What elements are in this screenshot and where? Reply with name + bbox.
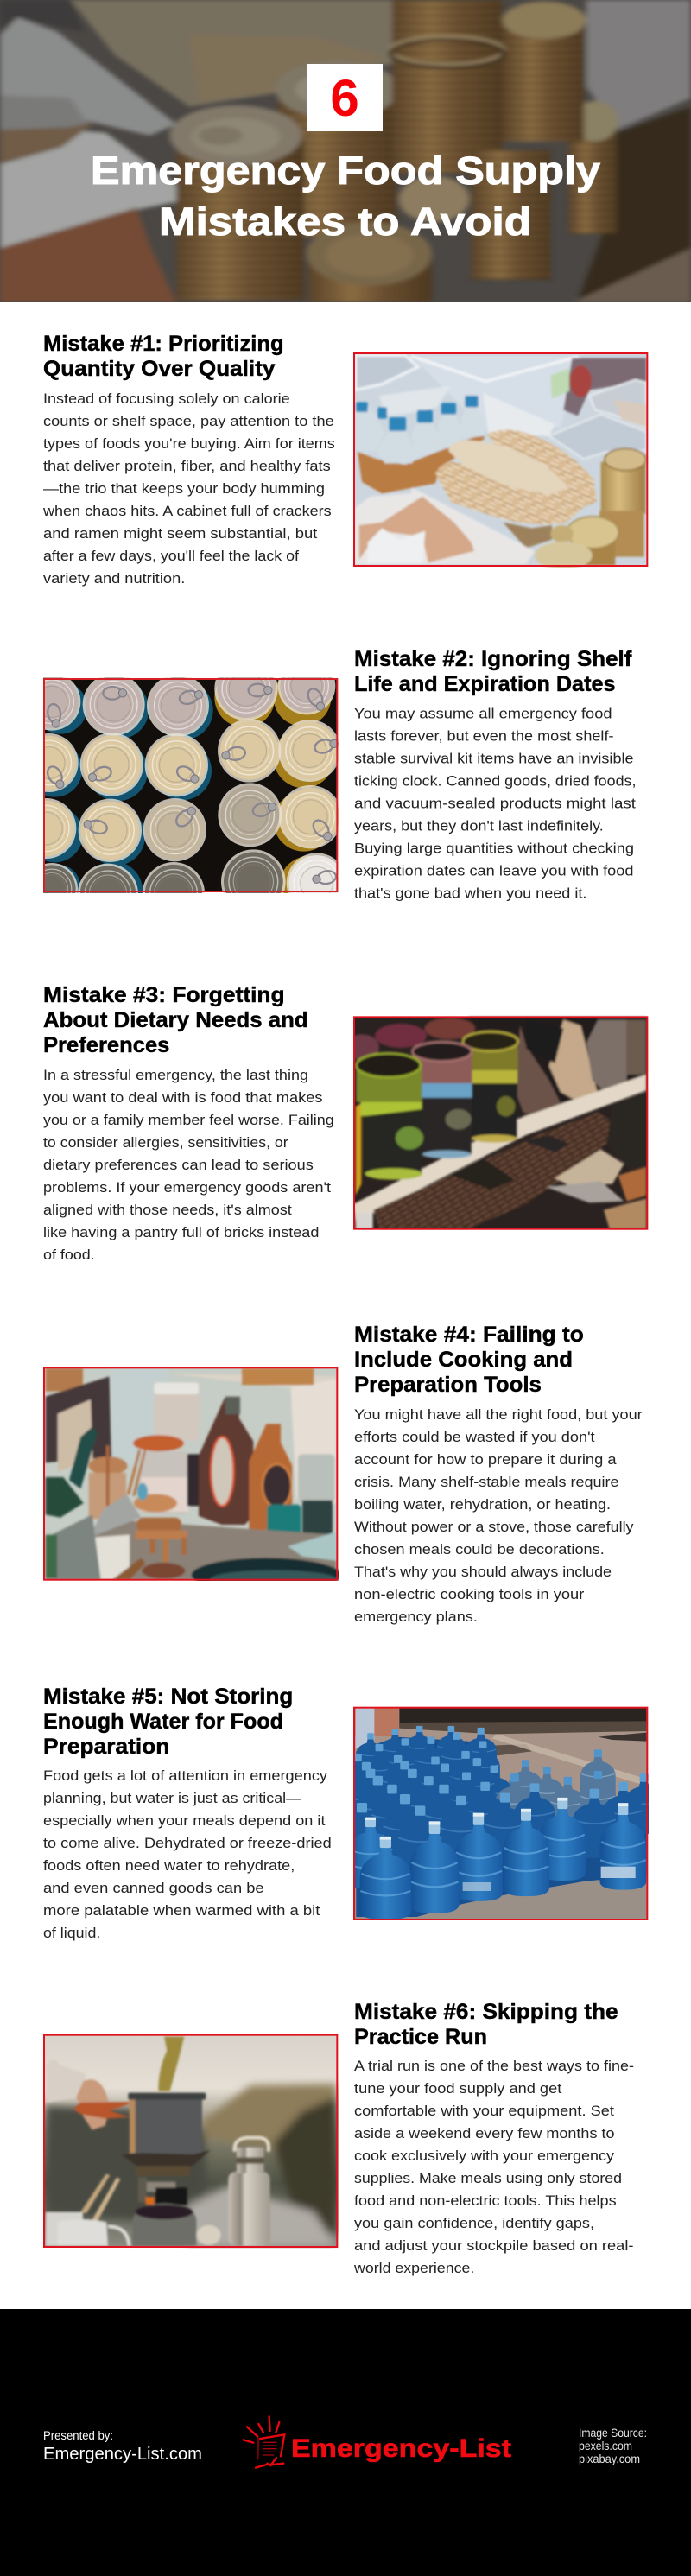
image source credits — [579, 2427, 647, 2465]
body text: mistake 5: to come alive. Dehydrated or freeze-dried — [43, 1835, 332, 1851]
heading: mistake 1: Mistake #1: Prioritizing — [43, 332, 284, 356]
body text: mistake 2: years, but they don't last indefinitely. — [354, 817, 604, 834]
heading: mistake 5 — [43, 1685, 293, 1759]
body text: mistake 4: efforts could be wasted if you don't — [354, 1429, 595, 1445]
body text: mistake 1: Instead of focusing solely on calorie — [43, 390, 290, 407]
body text: mistake 4: emergency plans. — [354, 1608, 478, 1625]
heading: mistake 3: About Dietary Needs and — [43, 1008, 308, 1032]
heading: mistake 6: Mistake #6: Skipping the — [354, 2000, 618, 2024]
body text: mistake 2: lasts forever, but even the most shelf- — [354, 727, 613, 745]
body text: mistake 1: after a few days, you'll feel the lack of — [43, 548, 299, 564]
heading: mistake 3: Preferences — [43, 1033, 169, 1057]
body text: mistake 6: A trial run is one of the best ways to fine- — [354, 2058, 634, 2074]
heading: mistake 6 — [354, 2000, 618, 2049]
body text: mistake 1: and ramen might seem substantial, but — [43, 525, 318, 542]
photo: camping stove with pot, noodles and steel bottle — [43, 2034, 339, 2249]
body text: mistake 5: Food gets a lot of attention in emergency — [43, 1767, 328, 1784]
photo: top-down rows of pull-tab cans — [43, 677, 339, 893]
body text: mistake 6: comfortable with your equipment. Set — [354, 2103, 614, 2119]
body text: mistake 5 — [43, 1767, 332, 1941]
body text: mistake 2: and vacuum-sealed products might last — [354, 795, 636, 812]
body text: mistake 1: types of foods you're buying. Aim for items — [43, 435, 335, 452]
body text: mistake 1: that deliver protein, fiber, and healthy fats — [43, 458, 331, 474]
body text: mistake 1: variety and nutrition. — [43, 570, 185, 587]
body text: mistake 3: like having a pantry full of bricks instead — [43, 1224, 319, 1240]
body text: mistake 1: counts or shelf space, pay attention to the — [43, 413, 334, 429]
title: Mistakes to Avoid — [159, 200, 531, 244]
image source credits: pexels.com — [579, 2440, 632, 2452]
body text: mistake 6: cook exclusively with your emergency — [354, 2148, 615, 2164]
body text: mistake 2: that's gone bad when you need it. — [354, 885, 586, 902]
logo wordmark: Emergency-List — [291, 2434, 511, 2463]
heading: mistake 6: Practice Run — [354, 2025, 487, 2049]
header photo: stacked cans and bags with dark overlay — [0, 0, 691, 302]
heading: mistake 3 — [43, 983, 308, 1057]
panel: mistake 1 — [42, 332, 647, 587]
body text: mistake 3: of food. — [43, 1247, 95, 1263]
body text: mistake 4: You might have all the right food, but your — [354, 1406, 643, 1423]
body text: mistake 3: dietary preferences can lead to serious — [43, 1157, 314, 1173]
body text: mistake 2: You may assume all emergency food — [354, 705, 612, 722]
title — [91, 149, 600, 244]
heading: mistake 2: Life and Expiration Dates — [354, 672, 615, 696]
body text: mistake 2: expiration dates can leave you with food — [354, 862, 634, 879]
body text: mistake 4 — [354, 1406, 643, 1625]
body text: mistake 1 — [42, 390, 335, 587]
presented by: Emergency-List.com — [43, 2445, 202, 2464]
heading: mistake 4: Mistake #4: Failing to — [354, 1323, 584, 1347]
body text: mistake 3: aligned with those needs, it's almost — [43, 1202, 292, 1218]
body text: mistake 3: you want to deal with is food that makes — [43, 1089, 323, 1106]
body text: mistake 6: tune your food supply and get — [354, 2080, 562, 2097]
body text: mistake 2: Buying large quantities without checking — [354, 840, 634, 857]
body text: mistake 5: planning, but water is just as critical— — [43, 1790, 301, 1806]
header banner — [0, 0, 691, 302]
body text: mistake 6: supplies. Make meals using only stored — [354, 2170, 622, 2186]
body text: mistake 3: to consider allergies, sensitivities, or — [43, 1134, 288, 1151]
heading: mistake 5: Mistake #5: Not Storing — [43, 1685, 293, 1709]
body text: mistake 4: chosen meals could be decorations. — [354, 1541, 605, 1558]
body text: mistake 4: That's why you should always include — [354, 1564, 612, 1580]
image source credits: Image Source: — [579, 2427, 647, 2440]
body text: mistake 3: problems. If your emergency goods aren't — [43, 1179, 331, 1196]
photo: bottled water, pasta bags and cans in storage tubs — [353, 352, 649, 568]
presented by: Presented by: — [43, 2429, 113, 2442]
body text: mistake 6: world experience. — [353, 2260, 474, 2276]
photo: rows of blue water jugs on pavement — [353, 1707, 649, 1920]
body text: mistake 5: more palatable when warmed with a bit — [43, 1902, 320, 1919]
image source credits: pixabay.com — [579, 2452, 640, 2465]
body text: mistake 6: food and non-electric tools. This helps — [354, 2192, 617, 2209]
logo — [244, 2416, 511, 2468]
body text: mistake 5: especially when your meals depend on it — [43, 1812, 326, 1829]
footer band — [0, 2309, 691, 2576]
body text: mistake 4: crisis. Many shelf-stable meals require — [354, 1474, 619, 1490]
number badge: 6 — [330, 69, 359, 127]
heading: mistake 2: Mistake #2: Ignoring Shelf — [354, 647, 632, 671]
panel: mistake 3 — [43, 983, 647, 1263]
body text: mistake 5: of liquid. — [43, 1925, 100, 1941]
body text: mistake 2: ticking clock. Canned goods, dried foods, — [354, 772, 636, 790]
heading: mistake 4 — [354, 1323, 584, 1397]
number badge — [307, 64, 383, 131]
body text: mistake 5: and even canned goods can be — [43, 1880, 264, 1896]
panel: mistake 6 — [44, 2000, 634, 2276]
photo: cluttered kitchen counter with syrup bottles and utensils — [43, 1367, 339, 1581]
body text: mistake 2: stable survival kit items have an invisible — [354, 750, 634, 767]
heading: mistake 1: Quantity Over Quality — [43, 357, 275, 381]
panel: mistake 4 — [44, 1323, 643, 1625]
heading: mistake 1 — [43, 332, 284, 381]
body text: mistake 5: foods often need water to rehydrate, — [43, 1857, 295, 1874]
heading: mistake 5: Preparation — [43, 1735, 169, 1759]
panel: mistake 5 — [43, 1685, 663, 1941]
body text: mistake 6 — [353, 2058, 634, 2276]
heading: mistake 5: Enough Water for Food — [43, 1710, 283, 1734]
body text: mistake 3: In a stressful emergency, the last thing — [43, 1067, 308, 1083]
body text: mistake 6: aside a weekend every few months to — [354, 2125, 615, 2141]
body text: mistake 4: Without power or a stove, those carefully — [354, 1519, 634, 1535]
body text: mistake 6: and adjust your stockpile based on real- — [354, 2237, 634, 2254]
title: Emergency Food Supply — [91, 149, 600, 193]
body text: mistake 1: —the trio that keeps your body humming — [43, 480, 325, 497]
body text: mistake 6: you gain confidence, identify gaps, — [354, 2215, 594, 2231]
heading: mistake 4: Preparation Tools — [354, 1373, 542, 1397]
photo: pantry shelves with canisters and dried food bags — [353, 1015, 648, 1230]
panel: mistake 2 — [16, 647, 637, 924]
body text: mistake 2 — [354, 705, 636, 902]
body text: mistake 1: when chaos hits. A cabinet full of crackers — [42, 503, 332, 519]
icon: checklist with rays — [242, 2415, 286, 2469]
body text: mistake 4: non-electric cooking tools in your — [354, 1586, 585, 1602]
heading: mistake 2 — [354, 647, 632, 696]
body text: mistake 3: you or a family member feel worse. Failing — [43, 1112, 334, 1128]
body text: mistake 4: account for how to prepare it during a — [354, 1451, 617, 1468]
presented by — [43, 2429, 202, 2464]
heading: mistake 3: Mistake #3: Forgetting — [43, 983, 285, 1007]
body text: mistake 3 — [43, 1067, 334, 1263]
heading: mistake 4: Include Cooking and — [354, 1348, 573, 1372]
body text: mistake 4: boiling water, rehydration, or heating. — [354, 1496, 611, 1513]
